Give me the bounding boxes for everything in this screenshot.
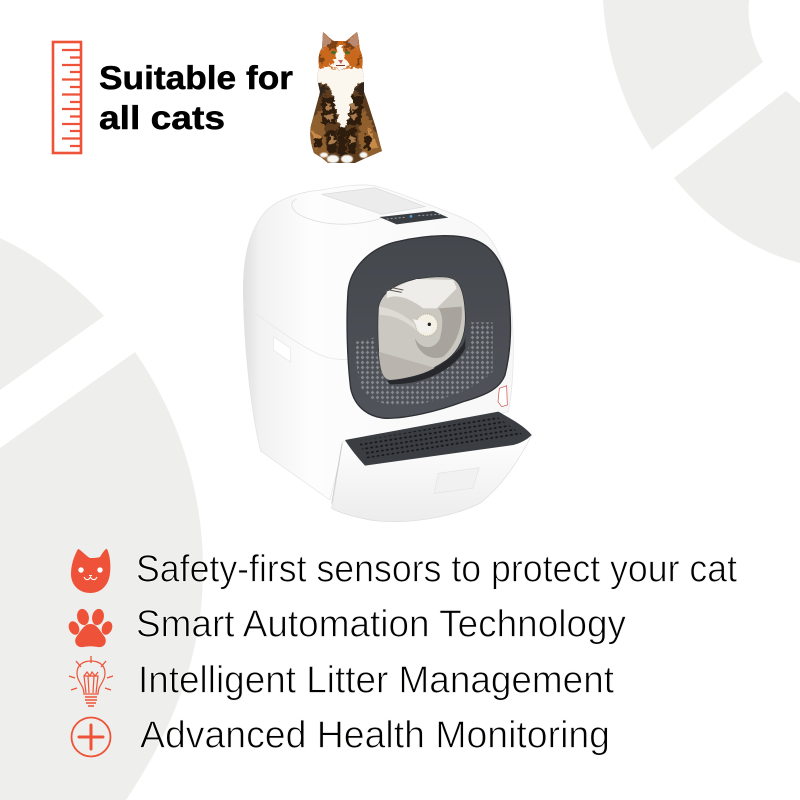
top lid outline	[292, 199, 387, 224]
cat ears	[322, 30, 358, 50]
icon: paw print	[67, 608, 114, 647]
icon: plus in circle	[72, 718, 110, 756]
feature: health monitoring: Advanced Health Monitoring	[140, 714, 610, 756]
heading: suitable for all cats: all cats	[99, 99, 225, 136]
box body	[243, 185, 513, 500]
heading: suitable for all cats: Suitable for	[99, 59, 293, 96]
feature: smart automation: Smart Automation Technology	[136, 604, 626, 646]
cat eyes	[331, 51, 350, 54]
cavity floor shadow	[387, 335, 465, 384]
safety label	[498, 386, 507, 407]
feature: litter management: Intelligent Litter Management	[138, 660, 614, 702]
cat white ruff	[314, 67, 366, 128]
illustration: smart litter box	[243, 185, 532, 522]
feature: safety sensors: Safety-first sensors to protect your cat	[136, 548, 737, 590]
background: left arc segments	[0, 238, 203, 800]
cat outer haunch shading	[306, 106, 386, 162]
icon: ruler	[53, 42, 81, 153]
upper shell seam	[243, 304, 355, 359]
feature list	[136, 548, 737, 756]
cat dark cheek and forehead markings	[318, 38, 362, 66]
step tray	[345, 412, 532, 466]
cat white paws	[320, 152, 368, 163]
cavity opening	[378, 277, 465, 380]
background: top right arc segments	[603, 0, 800, 263]
cavity interior	[379, 279, 462, 380]
textured grip mat	[356, 322, 493, 406]
side handle	[273, 337, 291, 362]
icon: cat face	[71, 549, 110, 593]
cat dark collar shadow	[318, 82, 364, 98]
drawer seam	[332, 443, 342, 503]
control panel	[379, 211, 448, 224]
drawer front	[332, 435, 532, 522]
cat nose	[338, 60, 343, 64]
cat fur	[310, 32, 382, 163]
cat head fur	[318, 32, 363, 71]
dark window ring	[347, 236, 511, 418]
drawer handle	[434, 468, 479, 493]
cat muzzle blaze	[330, 44, 350, 70]
illustration: sitting cat	[310, 32, 382, 163]
top window	[322, 188, 425, 214]
heading: suitable for all cats	[99, 59, 293, 136]
icon: light bulb	[69, 656, 113, 706]
